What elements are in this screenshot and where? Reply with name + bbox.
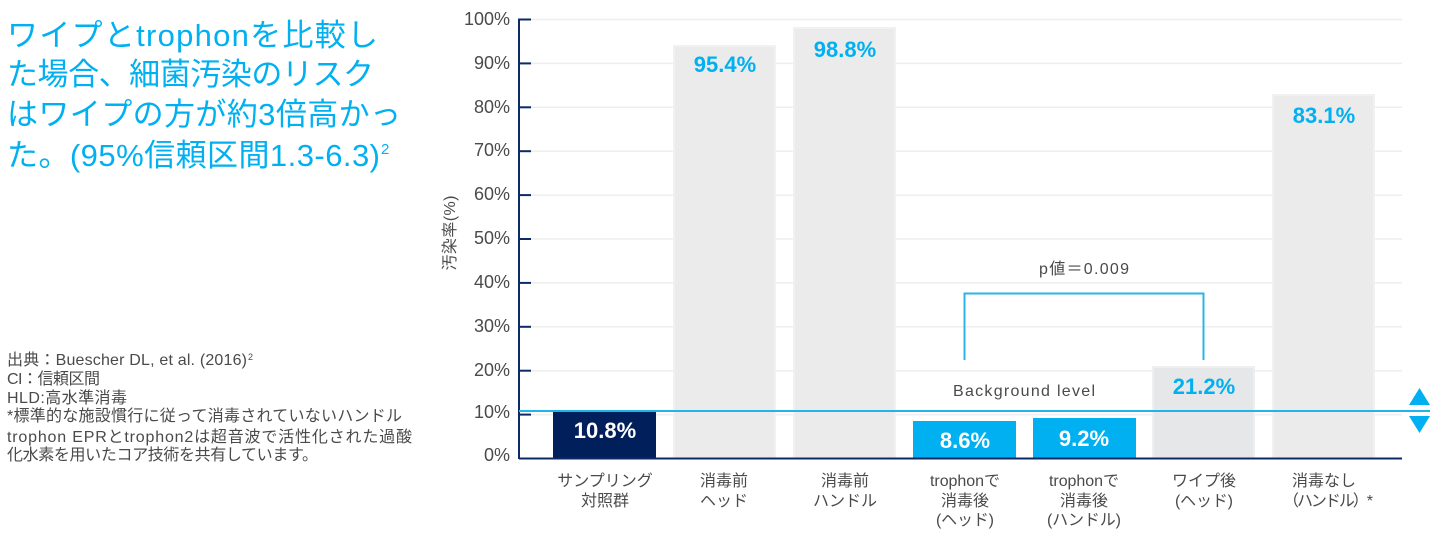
significance bracket: p値＝0.009 bbox=[1039, 260, 1129, 278]
significance bracket bbox=[964, 260, 1204, 360]
title: ワイプとtrophonを比較し bbox=[7, 18, 378, 53]
bar: sampling control 10.8%: 10.8% bbox=[574, 418, 636, 443]
bar: after wipe head 21.2%: 21.2% bbox=[1173, 374, 1235, 399]
y axis labels: 20% bbox=[474, 360, 510, 380]
x axis labels: 対照群 bbox=[581, 492, 629, 510]
bar: after wipe head 21.2% bbox=[1153, 367, 1254, 458]
x axis labels: (ハンドル) bbox=[1047, 512, 1121, 529]
bar: trophon handle 9.2% bbox=[1033, 418, 1136, 458]
x axis labels: （ハンドル）* bbox=[1283, 492, 1373, 510]
x axis labels: ヘッド bbox=[700, 493, 748, 510]
y axis labels: 40% bbox=[474, 272, 510, 292]
bar: trophon head 8.6% bbox=[913, 421, 1016, 458]
footnotes: CI：信頼区間 bbox=[7, 370, 100, 388]
title: はワイプの方が約3倍高かっ bbox=[7, 97, 401, 132]
bar: trophon head 8.6%: 8.6% bbox=[940, 428, 990, 453]
x axis labels bbox=[557, 472, 1373, 529]
title: た場合、細菌汚染のリスク bbox=[7, 57, 374, 92]
bar: before disinfection head 95.4%: 95.4% bbox=[694, 52, 756, 77]
x axis labels: 消毒なし bbox=[1292, 472, 1356, 490]
y axis labels bbox=[464, 9, 510, 465]
x axis labels: 消毒前 bbox=[821, 472, 869, 490]
footnotes bbox=[7, 351, 412, 464]
bar: no disinfection handle 83.1% bbox=[1273, 95, 1374, 458]
grid lines and axis bbox=[518, 18, 1402, 459]
x axis labels: (ヘッド) bbox=[1175, 493, 1233, 510]
y axis title: 汚染率(%) bbox=[441, 196, 459, 270]
bar: trophon handle 9.2%: 9.2% bbox=[1059, 426, 1109, 451]
footnotes: HLD:高水準消毒 bbox=[7, 389, 127, 407]
y axis labels: 100% bbox=[464, 9, 510, 29]
y axis labels: 90% bbox=[474, 53, 510, 73]
background level label: Background level bbox=[953, 383, 1095, 400]
y axis labels: 10% bbox=[474, 402, 510, 422]
footnotes: *標準的な施設慣行に従って消毒されていないハンドル bbox=[7, 407, 402, 425]
bar: before disinfection handle 98.8% bbox=[794, 28, 895, 458]
background level line bbox=[519, 410, 1430, 412]
bar: before disinfection handle 98.8%: 98.8% bbox=[814, 37, 876, 62]
x axis labels: サンプリング bbox=[557, 472, 653, 490]
footnotes: 化水素を用いたコア技術を共有しています。 bbox=[7, 446, 318, 464]
y axis labels: 30% bbox=[474, 316, 510, 336]
y axis labels: 60% bbox=[474, 184, 510, 204]
icon: up and down arrows bbox=[1409, 388, 1430, 433]
x axis labels: (ヘッド) bbox=[936, 512, 994, 529]
x axis labels: 消毒前 bbox=[700, 472, 748, 490]
x axis labels: trophonで bbox=[930, 473, 1000, 490]
y axis labels: 0% bbox=[484, 445, 510, 465]
x axis labels: trophonで bbox=[1049, 473, 1119, 490]
title: た。(95%信頼区間1.3-6.3) bbox=[7, 138, 380, 173]
y axis labels: 70% bbox=[474, 140, 510, 160]
footnotes: 2 bbox=[248, 352, 253, 362]
x axis baseline bbox=[519, 458, 1402, 460]
y axis labels: 80% bbox=[474, 97, 510, 117]
x axis labels: 消毒後 bbox=[1060, 492, 1108, 510]
title bbox=[7, 18, 401, 173]
footnotes: 出典：Buescher DL, et al. (2016) bbox=[7, 351, 247, 369]
x axis labels: ハンドル bbox=[813, 493, 877, 510]
bar: no disinfection handle 83.1%: 83.1% bbox=[1293, 103, 1355, 128]
bar: sampling control 10.8% bbox=[553, 411, 656, 458]
x axis labels: ワイプ後 bbox=[1172, 472, 1236, 490]
y axis labels: 50% bbox=[474, 228, 510, 248]
footnotes: trophon EPRとtrophon2は超音波で活性化された過酸 bbox=[7, 428, 412, 446]
x axis labels: 消毒後 bbox=[941, 492, 989, 510]
bar: before disinfection head 95.4% bbox=[674, 46, 775, 458]
title: 2 bbox=[381, 141, 389, 158]
